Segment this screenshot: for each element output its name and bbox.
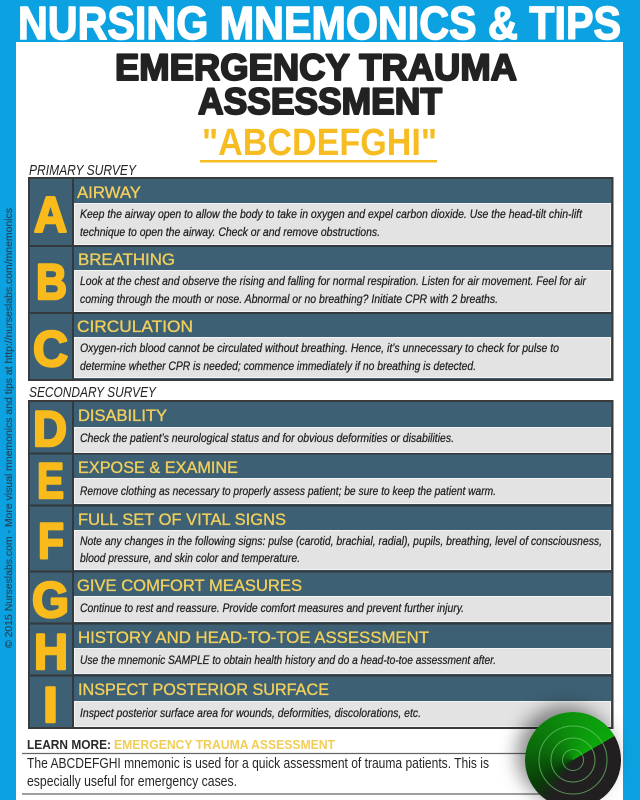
row I: inspect posterior surface: Inspect posterior surface area for wounds, deformities, discolorations, etc. [80,706,421,720]
row C: circulation: determine whether CPR is needed; commence immediately if no breathing is detected. [80,359,476,373]
row E: expose and examine [37,453,610,509]
row E: expose and examine: E [37,453,64,509]
row F: full set of vital signs: blood pressure, and skin color and temperature. [80,551,300,565]
row A: airway: AIRWAY [77,183,141,202]
label: secondary survey: SECONDARY SURVEY [29,384,157,401]
row I: inspect posterior surface: I [43,677,58,733]
row A: airway: technique to open the airway. Check or and remove obstructions. [80,225,380,239]
summary text: especially useful for emergency cases. [27,773,237,790]
heading: emergency trauma assessment: EMERGENCY TRAUMA [115,47,517,88]
row E: expose and examine: EXPOSE & EXAMINE [78,458,238,477]
row C: circulation [33,317,610,378]
row I: inspect posterior surface: INSPECT POSTERIOR SURFACE [78,680,329,699]
panel: primary survey table [28,178,613,380]
row G: give comfort measures: G [32,572,69,628]
learn more heading: LEARN MORE: [27,737,111,752]
label: primary survey: PRIMARY SURVEY [29,162,137,179]
row D: disability: D [33,401,67,457]
row A: airway [34,183,610,244]
row B: breathing: B [36,254,67,310]
row H: history and head-to-toe assessment [34,624,610,680]
row D: disability: DISABILITY [78,406,167,425]
row H: history and head-to-toe assessment: H [34,624,68,680]
heading: emergency trauma assessment [115,47,517,122]
summary text [27,755,489,790]
row H: history and head-to-toe assessment: HISTORY AND HEAD-TO-TOE ASSESSMENT [78,628,429,647]
row B: breathing: coming through the mouth or nose. Abnormal or no breathing? Initiate CPR with 2 breaths. [80,292,498,306]
row A: airway: Keep the airway open to allow the body to take in oxygen and expel carbon dioxide. Use the head-tilt chin-lift [80,207,583,221]
summary text: The ABCDEFGHI mnemonic is used for a quick assessment of trauma patients. This is [27,755,489,772]
heading: emergency trauma assessment: ASSESSMENT [198,81,442,122]
row G: give comfort measures [32,572,610,628]
row B: breathing: BREATHING [78,250,175,269]
row B: breathing [36,250,610,312]
row C: circulation: Oxygen-rich blood cannot be circulated without breathing. Hence, it’s unnecessary to check for pulse to [80,341,559,355]
row A: airway: A [34,187,67,243]
row F: full set of vital signs: FULL SET OF VITAL SIGNS [78,510,286,529]
row D: disability [33,401,610,457]
learn more heading [27,737,335,752]
row H: history and head-to-toe assessment: Use the mnemonic SAMPLE to obtain health history and do a head-to-toe assessment after. [80,653,496,667]
icon: radar [525,712,621,800]
row G: give comfort measures: GIVE COMFORT MEASURES [77,576,302,595]
row F: full set of vital signs [38,510,610,570]
mnemonic subtitle: "ABCDEFGHI" [202,122,437,164]
row C: circulation: C [33,321,68,377]
row C: circulation: CIRCULATION [77,317,193,336]
copyright vertical text: © 2015 Nurseslabs.com - More visual mnemonics and tips at http://nurseslabs.com/mnemonics [4,208,15,648]
row F: full set of vital signs: F [38,513,64,569]
row I: inspect posterior surface [43,677,610,733]
learn more heading: EMERGENCY TRAUMA ASSESSMENT [114,737,335,752]
row E: expose and examine: Remove clothing as necessary to properly assess patient; be sure to keep the patient warm. [80,484,496,498]
row D: disability: Check the patient’s neurological status and for obvious deformities or disabilities. [80,431,454,445]
row G: give comfort measures: Continue to rest and reassure. Provide comfort measures and prevent further injury. [80,601,464,615]
panel: secondary survey table [28,401,613,733]
